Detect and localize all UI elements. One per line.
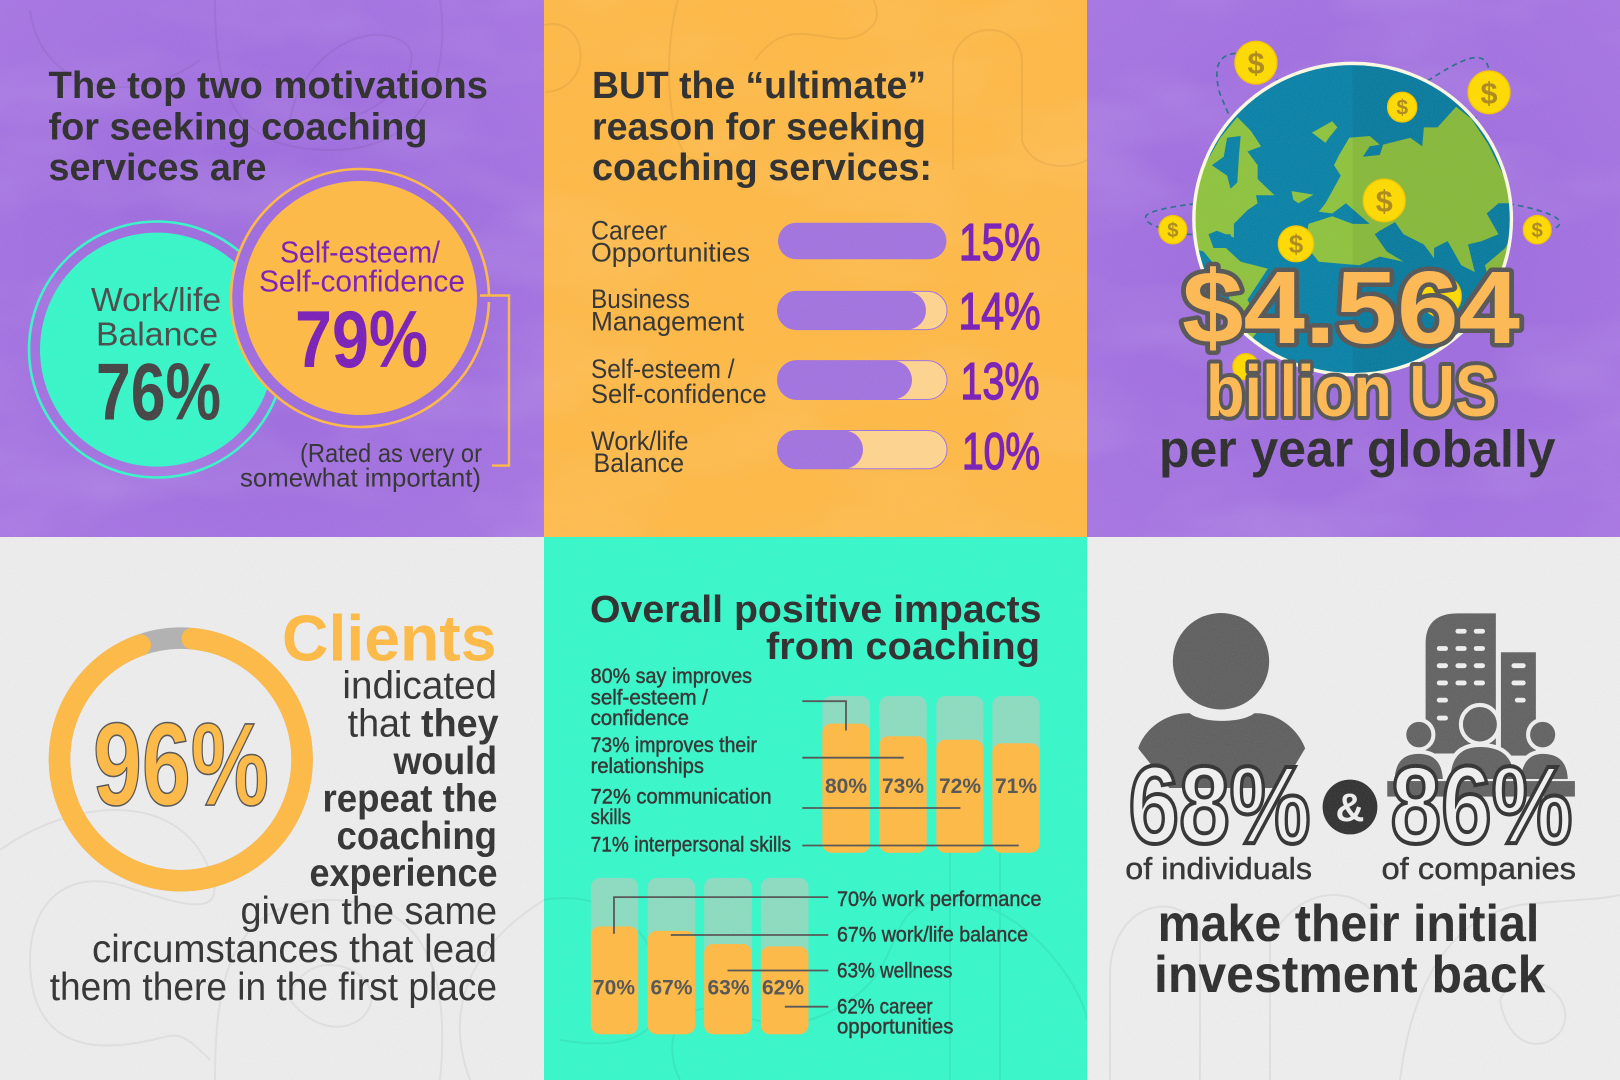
bar chart: upper: 73% [882,775,924,798]
row: work/life balance 10%: 10% [962,423,1040,481]
chart: 96% donut: 96% [93,699,269,831]
coins: $ [1532,219,1543,242]
text block: repeat experience: would [393,740,497,783]
row: self-esteem 13% [591,353,1040,411]
heading: ultimate reason: BUT the “ultimate” [592,65,926,107]
text block: repeat experience: given the same [240,890,497,933]
heading: top two motivations: for seeking coaching [48,106,428,148]
note: rated as very or somewhat important: somewhat important) [240,462,481,492]
row: self-esteem 13%: Self-esteem / [591,354,735,384]
icon: globe with coins [1146,41,1560,382]
text list: impact descriptions: 71% interpersonal skills [591,834,791,857]
lakes and seas [1208,136,1241,248]
text: make their initial investment back: investment back [1154,946,1545,1004]
bar chart: lower: 67% [650,977,693,1000]
text list: lower descriptions: 67% work/life balance [837,924,1028,947]
chart: 96% donut [49,627,313,892]
heading: overall positive impacts: Overall positive impacts [590,589,1041,631]
row: work/life balance 10%: Balance [594,448,684,478]
bar chart: lower: 63% [707,977,750,1000]
circle: self-esteem 79%: 79% [295,295,428,385]
coins: $ [1481,75,1498,110]
row: business management 14%: 14% [958,283,1040,341]
panel: motivations [0,0,544,537]
text: make their initial investment back [1154,895,1545,1004]
text list: impact descriptions: 73% improves their [591,734,757,757]
coins: $ [1376,183,1393,219]
bracket to note [480,296,509,466]
bar chart: upper: 71% [995,775,1037,798]
circle: work/life balance 76%: Balance [96,315,218,352]
note: rated as very or somewhat important [240,438,482,492]
stat: 86% of companies: of companies [1382,851,1576,886]
circle: work/life balance 76% [29,222,285,478]
heading: top two motivations [48,65,488,189]
text block: repeat experience: circumstances that lead [92,928,497,971]
row: business management 14% [591,283,1040,341]
heading: ultimate reason [592,65,932,189]
row: work/life balance 10%: Work/life [591,426,688,456]
text block: repeat experience: coaching [336,815,497,858]
row: career opportunities 15%: Career [591,215,667,245]
text list: lower descriptions: opportunities [837,1016,953,1038]
panel: return on investment [1087,537,1620,1080]
circle: self-esteem 79%: Self-esteem/ [280,234,440,269]
text list: impact descriptions: self-esteem / [591,686,708,709]
big number: $4.564 billion US: $4.564 [1182,250,1520,365]
bar chart: lower [591,878,828,1034]
row: business management 14%: Business [591,284,690,314]
icon: person [1138,613,1305,788]
panel: positive impacts [544,537,1087,1080]
text list: lower descriptions: 63% wellness [837,959,952,982]
text list: impact descriptions: 72% communication [591,786,772,808]
text list: impact descriptions: confidence [591,707,689,730]
icon: ampersand [1323,780,1377,834]
coins: $ [1289,229,1304,259]
panel: clients would repeat [0,537,544,1080]
text: make their initial investment back: make their initial [1158,895,1539,953]
panel: ultimate reason [544,0,1087,537]
circle: self-esteem 79%: Self-confidence [259,263,465,298]
row: self-esteem 13%: 13% [960,353,1040,411]
stat: 68% of individuals: 68% [1128,744,1310,867]
row: business management 14%: Management [591,307,744,337]
heading: ultimate reason: coaching services: [592,147,932,189]
row: self-esteem 13%: Self-confidence [591,379,766,409]
text block: repeat experience: that they [348,702,499,745]
text list: lower descriptions: 70% work performance [837,888,1041,911]
caption: per year globally: per year globally [1159,421,1556,479]
panel: global market [1087,0,1620,537]
big number: $4.564 billion US [1182,250,1520,432]
bar chart: upper: 80% [825,775,867,798]
coins: $ [1167,219,1179,242]
row: career opportunities 15%: 15% [959,214,1040,272]
bar chart: upper: 72% [939,775,981,798]
heading: top two motivations: The top two motivations [48,65,488,107]
row: career opportunities 15%: Opportunities [591,238,750,268]
bar chart: lower: 62% [762,977,804,1000]
circle: work/life balance 76%: 76% [96,348,221,438]
coins: $ [1247,45,1264,81]
circle: work/life balance 76%: Work/life [91,281,221,318]
text block: repeat experience: indicated [342,664,497,707]
text block: repeat experience [50,664,499,1009]
bar chart: lower: 70% [593,977,635,1000]
icon: buildings and people [1387,613,1575,797]
text block: repeat experience: repeat the [322,777,498,820]
big number: $4.564 billion US: billion US [1206,352,1497,432]
text block: repeat experience: experience [310,852,498,895]
text list: impact descriptions: relationships [591,755,704,778]
text list: lower descriptions [837,888,1041,1038]
circle: self-esteem 79% [231,169,492,427]
row: career opportunities 15% [591,214,1040,272]
text list: impact descriptions: skills [591,806,631,829]
icon: ampersand: & [1336,786,1364,830]
stat: 68% of individuals: of individuals [1125,851,1312,886]
heading: top two motivations: services are [48,147,266,189]
note: rated as very or somewhat important: (Rated as very or [300,438,482,468]
heading: ultimate reason: reason for seeking [592,106,926,148]
bar chart: upper [802,696,1040,853]
heading: overall positive impacts: from coaching [766,626,1040,668]
heading: overall positive impacts [590,589,1041,668]
text list: impact descriptions: 80% say improves [591,665,752,688]
heading: clients: Clients [282,602,496,674]
text list: impact descriptions [591,665,791,857]
text list: lower descriptions: 62% career [837,996,933,1019]
row: work/life balance 10% [591,423,1040,481]
land masses [1190,107,1516,344]
coins: $ [1396,97,1408,120]
stat: 86% of companies: 86% [1390,744,1572,867]
text block: repeat experience: them there in the first place [50,966,497,1009]
coins [1159,41,1551,380]
